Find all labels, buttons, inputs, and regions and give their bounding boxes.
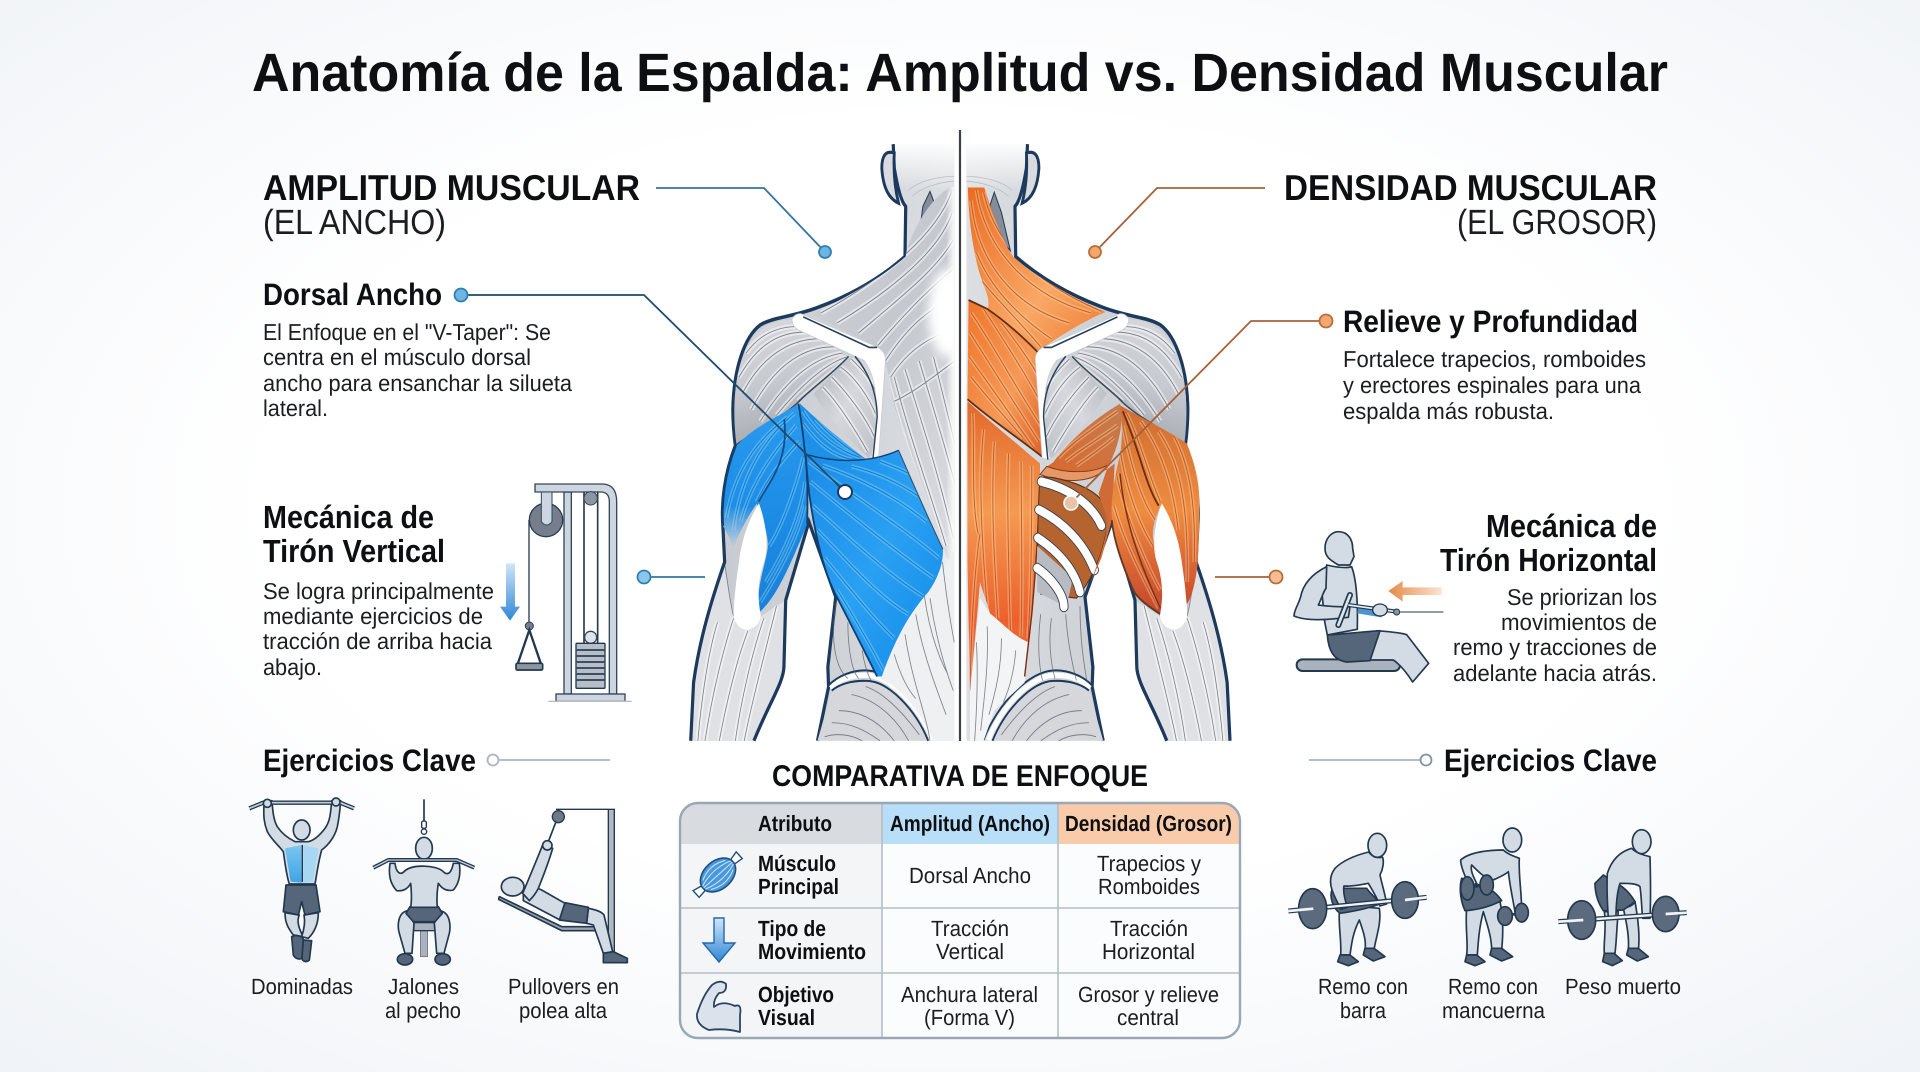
erector and lower back, orange [967, 401, 1040, 693]
text block: dorsal ancho: centra en el músculo dorsal [263, 344, 531, 370]
label: pullovers en polea alta: polea alta [519, 998, 608, 1023]
icon: dominadas [249, 798, 354, 962]
row tint [681, 844, 882, 1037]
label: peso muerto: Peso muerto [1565, 974, 1681, 999]
row: musculo principal [758, 851, 1201, 899]
text block: tiron vertical: mediante ejercicios de [263, 603, 483, 629]
header cells: Atributo [758, 811, 832, 836]
text block: dorsal ancho [263, 277, 572, 421]
text block: tiron vertical: Tirón Vertical [263, 533, 445, 569]
trapezius, grey [813, 186, 954, 578]
text block: relieve y profundidad: y erectores espinales para una [1343, 372, 1641, 398]
heading: densidad muscular [1284, 167, 1657, 242]
heading: densidad muscular: DENSIDAD MUSCULAR [1284, 167, 1657, 208]
rhomboid, orange [967, 300, 1042, 457]
text block: dorsal ancho: Dorsal Ancho [263, 277, 442, 312]
text block: dorsal ancho: El Enfoque en el "V-Taper": Se [263, 319, 551, 345]
neck tips [920, 192, 938, 241]
icon: remo con barra [1288, 833, 1427, 966]
trapezius, orange [968, 188, 1106, 351]
latissimus dorsi, blue [806, 450, 943, 676]
heading: ejercicios clave izquierda: Ejercicios Clave [263, 743, 476, 778]
connector: tiron vertical [638, 570, 705, 584]
icon: peso muerto [1558, 830, 1687, 966]
text block: tiron vertical [263, 499, 494, 680]
triceps tendon right [1154, 503, 1187, 630]
anatomy illustration: back muscles [691, 141, 1230, 741]
left half: width muscles [691, 141, 967, 741]
text block: relieve y profundidad: Relieve y Profundidad [1343, 304, 1638, 339]
label: remo con mancuerna: Remo con [1448, 974, 1538, 999]
text block: tiron horizontal: Tirón Horizontal [1440, 542, 1657, 578]
icon: seated row figure [1294, 532, 1443, 682]
row: objetivo visual: Visual [758, 1005, 815, 1030]
connector: relieve y profundidad [1064, 314, 1332, 510]
label: pullovers en polea alta [508, 974, 619, 1023]
ribs [1038, 477, 1109, 598]
connector: dorsal ancho [454, 288, 852, 499]
heading: amplitud muscular: AMPLITUD MUSCULAR [263, 167, 640, 208]
row: objetivo visual: (Forma V) [924, 1005, 1015, 1030]
comparison table [680, 803, 1240, 1038]
title: Anatomía de la Espalda: Amplitud vs. Densidad Muscular [252, 43, 1668, 103]
icon: jalones al pecho [373, 799, 474, 965]
header cells: Densidad (Grosor) [1065, 811, 1232, 836]
text block: tiron horizontal: adelante hacia atrás. [1453, 660, 1657, 686]
header cells: Amplitud (Ancho) [890, 811, 1050, 836]
table grid [681, 804, 1239, 1037]
row: tipo de movimiento [758, 916, 1195, 964]
label: jalones al pecho [385, 974, 461, 1023]
text block: relieve y profundidad [1343, 304, 1646, 424]
icon: down arrow [703, 918, 735, 962]
right half: thickness muscles [966, 141, 1230, 741]
text block: dorsal ancho: lateral. [263, 395, 328, 421]
icon: muscle [687, 845, 749, 905]
text block: tiron vertical: abajo. [263, 654, 322, 680]
teres right, orange [1047, 404, 1121, 475]
row: musculo principal: Dorsal Ancho [909, 863, 1031, 888]
row: objetivo visual: Anchura lateral [901, 982, 1038, 1007]
label: remo con mancuerna [1442, 974, 1546, 1023]
connector: tiron horizontal [1215, 570, 1282, 584]
row: musculo principal: Músculo [758, 851, 836, 876]
row: objetivo visual: Grosor y relieve [1078, 982, 1219, 1007]
text block: tiron horizontal: Mecánica de [1486, 508, 1657, 544]
row: tipo de movimiento: Tracción [931, 916, 1009, 941]
heading: ejercicios clave derecha: Ejercicios Clave [1444, 743, 1657, 778]
text block: tiron vertical: tracción de arriba hacia [263, 628, 492, 654]
label: pullovers en polea alta: Pullovers en [508, 974, 619, 999]
icon: pullovers en polea alta [499, 809, 627, 963]
shoulder muscles right [1035, 314, 1186, 460]
neck tips right [990, 192, 1010, 251]
text block: tiron horizontal: movimientos de [1501, 609, 1657, 635]
row: musculo principal: Romboides [1098, 874, 1200, 899]
icon: lat pulldown machine [500, 484, 632, 702]
label: remo con mancuerna: mancuerna [1442, 998, 1546, 1023]
text block: relieve y profundidad: espalda más robusta. [1343, 398, 1554, 424]
row: objetivo visual: central [1117, 1005, 1179, 1030]
shoulder muscles left [734, 314, 885, 460]
text block: tiron horizontal: remo y tracciones de [1453, 634, 1657, 660]
row: tipo de movimiento: Vertical [936, 939, 1004, 964]
label: remo con barra [1318, 974, 1408, 1023]
center divider line [959, 130, 961, 741]
pale lower torso, right [970, 598, 1029, 741]
heading: comparativa de enfoque: COMPARATIVA DE ENFOQUE [772, 760, 1148, 793]
heading: ejercicios clave izquierda [263, 743, 610, 778]
teres, blue [800, 404, 867, 461]
text block: tiron horizontal: Se priorizan los [1507, 584, 1657, 610]
row: objetivo visual: Objetivo [758, 982, 834, 1007]
upper arm, blue [722, 404, 808, 613]
text block: tiron vertical: Mecánica de [263, 499, 434, 535]
text block: tiron vertical: Se logra principalmente [263, 578, 494, 604]
row: tipo de movimiento: Horizontal [1102, 939, 1195, 964]
text block: dorsal ancho: ancho para ensanchar la silueta [263, 370, 572, 396]
header cells [681, 804, 1239, 844]
heading: densidad muscular: (EL GROSOR) [1457, 203, 1657, 242]
text block: relieve y profundidad: Fortalece trapecios, romboides [1343, 346, 1646, 372]
connector: densidad heading [1089, 188, 1265, 258]
row: musculo principal: Trapecios y [1097, 851, 1201, 876]
side strip, orange [1091, 464, 1115, 582]
label: dominadas: Dominadas [251, 974, 353, 999]
label: jalones al pecho: Jalones [388, 974, 459, 999]
icon: flexed arm [697, 982, 740, 1032]
connector: amplitud heading [656, 188, 831, 258]
heading: ejercicios clave derecha [1309, 743, 1657, 778]
row: tipo de movimiento: Movimiento [758, 939, 866, 964]
table background [680, 803, 1240, 1038]
upper arm right, orange [1111, 405, 1199, 615]
triceps tendon, white [734, 503, 767, 630]
row: tipo de movimiento: Tipo de [758, 916, 826, 941]
label: remo con barra: Remo con [1318, 974, 1408, 999]
row: tipo de movimiento: Tracción [1110, 916, 1188, 941]
icon: remo con mancuerna [1460, 828, 1528, 966]
row: objetivo visual [758, 982, 1219, 1030]
text block: tiron horizontal [1440, 508, 1657, 686]
label: remo con barra: barra [1340, 998, 1387, 1023]
heading: amplitud muscular: (EL ANCHO) [263, 203, 446, 242]
lower back, pale [882, 548, 954, 683]
label: jalones al pecho: al pecho [385, 998, 461, 1023]
row: musculo principal: Principal [758, 874, 839, 899]
heading: amplitud muscular [263, 167, 640, 242]
